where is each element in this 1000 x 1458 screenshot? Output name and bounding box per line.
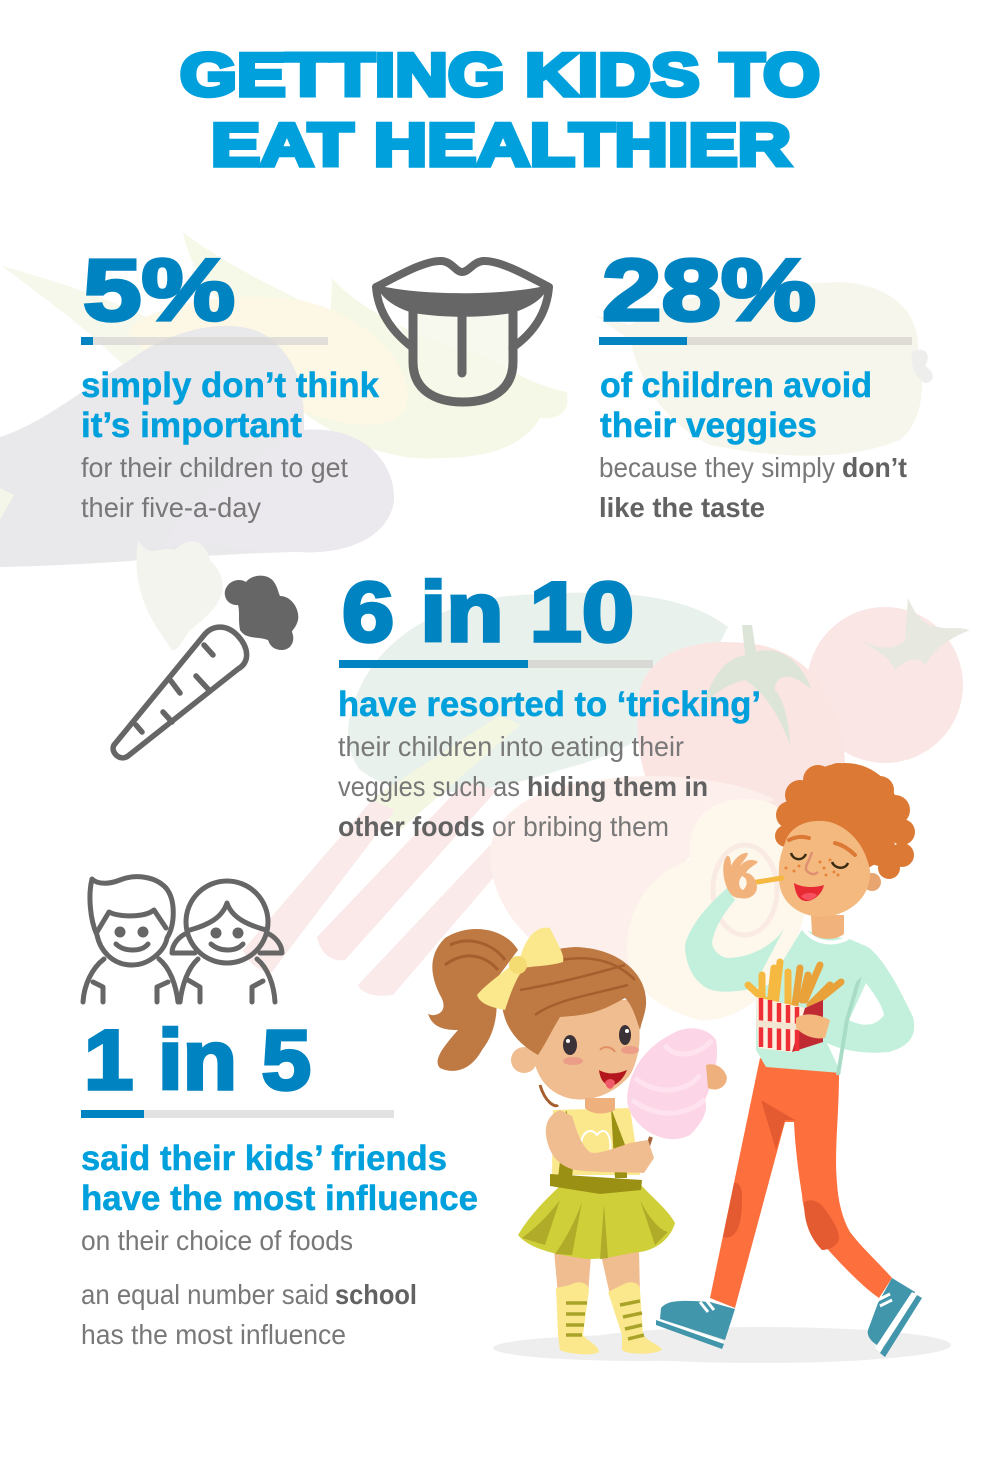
- background: faded vegetables: [0, 232, 970, 1020]
- hand on box: [796, 1014, 830, 1038]
- fries box: [748, 962, 841, 1052]
- body text: choice of foods: on their choice of foods: [81, 1225, 353, 1256]
- title: GETTING KIDS TO: [180, 42, 820, 108]
- girl: [172, 881, 282, 1002]
- candy floss: [627, 1028, 717, 1139]
- body text 5%: [81, 452, 348, 523]
- body text 5%: their five-a-day: [81, 492, 261, 523]
- hair bow: [477, 928, 563, 1010]
- legs: [554, 1250, 640, 1295]
- rhubarb sticks: [243, 782, 500, 996]
- tomatoes: [637, 598, 970, 847]
- panel: 5% stat: [81, 242, 380, 523]
- body text 6 in 10: hiding them in: [527, 771, 708, 802]
- subheading: of children avoid: their veggies: [600, 406, 817, 445]
- panel: 6 in 10 stat: [338, 565, 761, 842]
- red pepper: [490, 776, 775, 1001]
- subheading: simply don't think: [81, 366, 380, 445]
- sweater: [685, 888, 914, 1075]
- body text 5%: for their children to get: [81, 452, 348, 483]
- corn: [2, 232, 568, 458]
- figure: 6 in 10: 6 in 10: [342, 565, 634, 659]
- panel: 28% stat: [599, 242, 912, 523]
- body text 6 in 10: their children into eating their: [338, 731, 684, 762]
- subheading: of children avoid: [600, 366, 872, 445]
- shoes: [656, 1278, 922, 1357]
- trousers: [710, 1058, 892, 1308]
- figure: 1 in 5: 1 in 5: [84, 1013, 311, 1107]
- far hand: [706, 1064, 727, 1090]
- body text 28%: like the taste: [599, 492, 765, 523]
- top and belt: [550, 1108, 642, 1194]
- progress bar 5%: [81, 337, 328, 345]
- head: [511, 1000, 640, 1114]
- panel: 1 in 5 stat: [81, 1013, 478, 1350]
- fry and hand: [723, 853, 782, 899]
- ponytail: [428, 929, 518, 1071]
- subheading: simply don't think: simply don’t think: [81, 366, 380, 405]
- skirt: [518, 1185, 675, 1259]
- subheading: of children avoid: of children avoid: [600, 366, 872, 405]
- progress bar 28%: [599, 337, 912, 345]
- eggplants: [0, 326, 394, 650]
- ground shadow: [493, 1327, 951, 1363]
- icon: carrot: [113, 576, 298, 758]
- subheading: friends have the most influence: have the most influence: [81, 1179, 478, 1218]
- body text 6 in 10: veggies such as: [338, 771, 520, 802]
- body text: school influence: school: [335, 1279, 417, 1310]
- body text: school influence: has the most influence: [81, 1319, 346, 1350]
- body text 6 in 10: other foods: [338, 811, 485, 842]
- hair: [502, 947, 646, 1055]
- face: [779, 821, 881, 917]
- subheading: friends have the most influence: said their kids’ friends: [81, 1139, 447, 1178]
- body text: school influence: an equal number said: [81, 1279, 329, 1310]
- figure: 5%: 5%: [83, 242, 235, 339]
- icon: lips and tongue: [376, 261, 549, 402]
- body text 28%: because they simply: [599, 452, 835, 483]
- subheading: friends have the most influence: [81, 1139, 478, 1218]
- arm: [546, 1110, 654, 1173]
- hair: [775, 763, 915, 879]
- illustration: boy eating fries: [656, 763, 922, 1357]
- body text 28%: [599, 452, 907, 523]
- figure: 28%: 28%: [602, 242, 816, 339]
- candy floss stick: [646, 1137, 651, 1152]
- boots: [556, 1282, 662, 1354]
- body text 6 in 10: or bribing them: [492, 811, 669, 842]
- cucumber: [348, 593, 728, 830]
- progress bar 6 in 10: [339, 660, 653, 668]
- subheading: have resorted to tricking: have resorted to ‘tricking’: [338, 685, 761, 724]
- body text 6 in 10: [338, 731, 708, 842]
- title: [180, 42, 820, 178]
- illustration: girl with candy floss: [428, 928, 727, 1354]
- icon: boy and girl: [83, 877, 282, 1002]
- title: EAT HEALTHIER: [211, 112, 791, 178]
- progress bar 1 in 5: [81, 1110, 394, 1118]
- bell pepper: [595, 282, 933, 456]
- onion: [627, 799, 812, 1020]
- boy: [83, 877, 178, 1002]
- body text: school influence: [81, 1279, 417, 1350]
- neck: [811, 915, 844, 939]
- subheading: simply don't think: it’s important: [81, 406, 302, 445]
- body text 28%: don’t: [842, 452, 907, 483]
